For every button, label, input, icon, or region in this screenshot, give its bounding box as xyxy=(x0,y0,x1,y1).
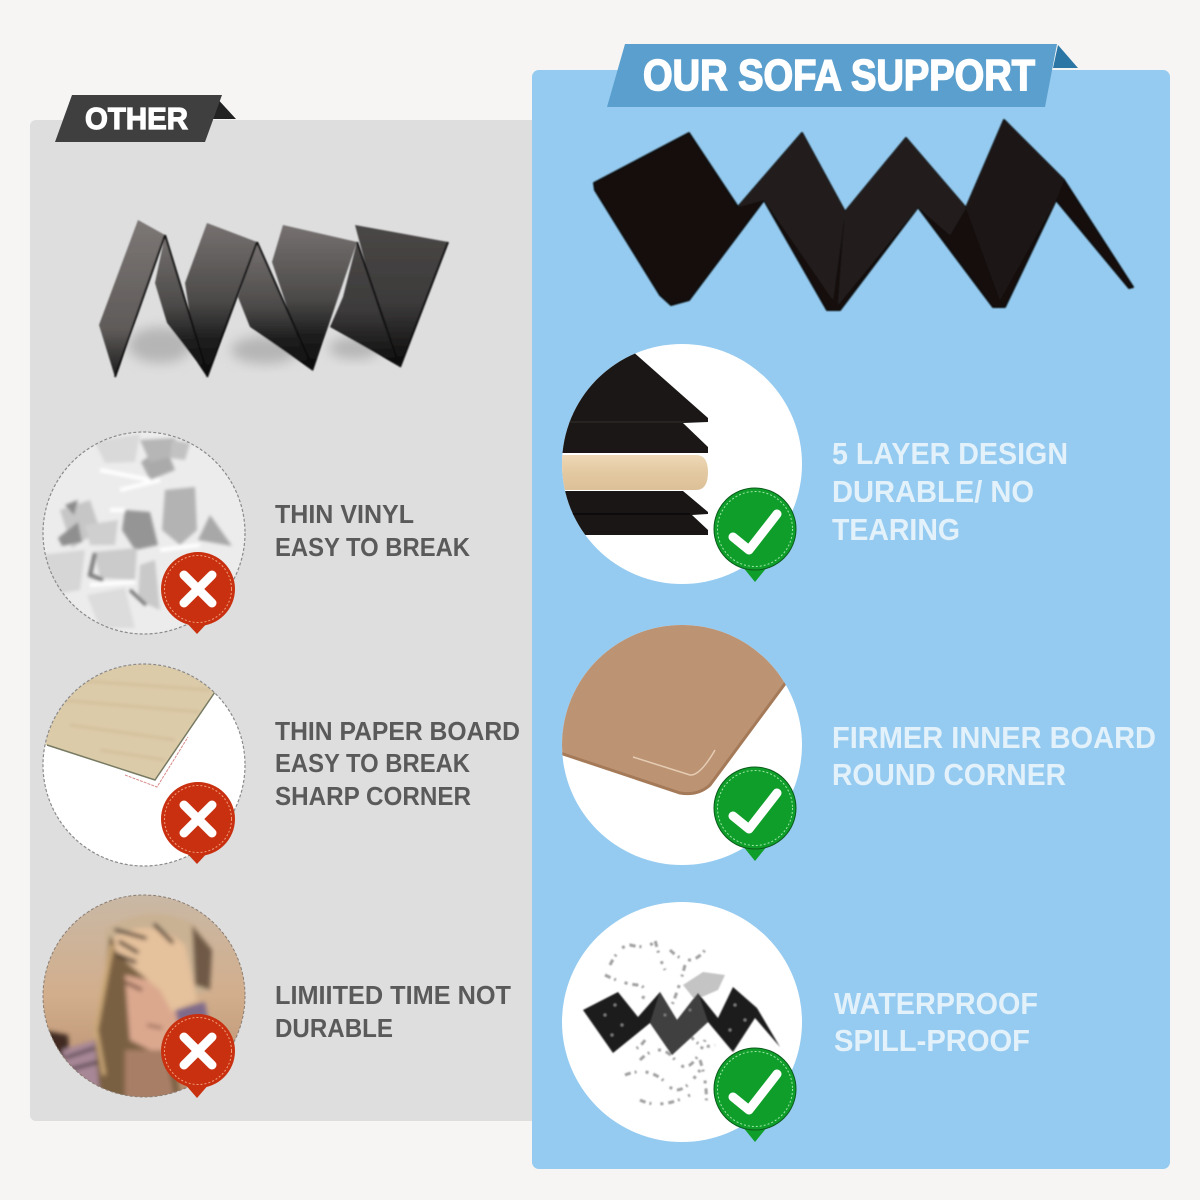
image: other folded support xyxy=(99,220,448,377)
icon: x badge 3 xyxy=(161,1014,235,1098)
heading: other xyxy=(55,95,236,142)
text: thin paper board: THIN PAPER BOARD xyxy=(275,716,520,746)
text: thin paper board: EASY TO BREAK xyxy=(275,748,470,778)
text: thin vinyl: THIN VINYL xyxy=(275,499,414,529)
text: thin paper board: SHARP CORNER xyxy=(275,781,471,811)
panel: other xyxy=(30,120,540,1121)
icon: x badge 2 xyxy=(161,782,235,864)
icon: check badge 1 xyxy=(714,488,796,582)
text: five layer design: DURABLE/ NO xyxy=(832,474,1034,509)
text: thin vinyl xyxy=(275,499,470,562)
icon group: stressed woman photo xyxy=(42,895,245,1100)
heading: our sofa support xyxy=(607,44,1078,107)
text: limited time: DURABLE xyxy=(275,1013,393,1043)
icon: check badge 2 xyxy=(714,767,796,861)
heading: our sofa support: OUR SOFA SUPPORT xyxy=(643,51,1035,100)
icon group: thin paper board xyxy=(40,660,245,866)
text: five layer design: 5 LAYER DESIGN xyxy=(832,436,1068,471)
text: firmer inner board: FIRMER INNER BOARD xyxy=(832,720,1156,755)
text: thin vinyl: EASY TO BREAK xyxy=(275,532,470,562)
icon group: broken vinyl xyxy=(40,432,245,634)
icon group: five layers xyxy=(560,340,802,584)
icon group: waterproof xyxy=(562,902,802,1142)
icon group: firmer board xyxy=(555,620,810,865)
text: waterproof xyxy=(834,986,1038,1058)
text: waterproof: SPILL-PROOF xyxy=(834,1023,1030,1058)
icon: x badge 1 xyxy=(161,552,235,634)
heading: other: OTHER xyxy=(85,101,188,136)
icon: check badge 3 xyxy=(714,1048,796,1142)
text: firmer inner board: ROUND CORNER xyxy=(832,757,1066,792)
text: limited time xyxy=(275,980,511,1043)
text: five layer design: TEARING xyxy=(832,512,960,547)
text: firmer inner board xyxy=(832,720,1156,792)
text: five layer design xyxy=(832,436,1068,547)
panel: our sofa support xyxy=(532,70,1170,1169)
image: our sofa support folded xyxy=(594,120,1133,310)
text: limited time: LIMIITED TIME NOT xyxy=(275,980,511,1010)
text: thin paper board xyxy=(275,716,520,811)
text: waterproof: WATERPROOF xyxy=(834,986,1038,1021)
